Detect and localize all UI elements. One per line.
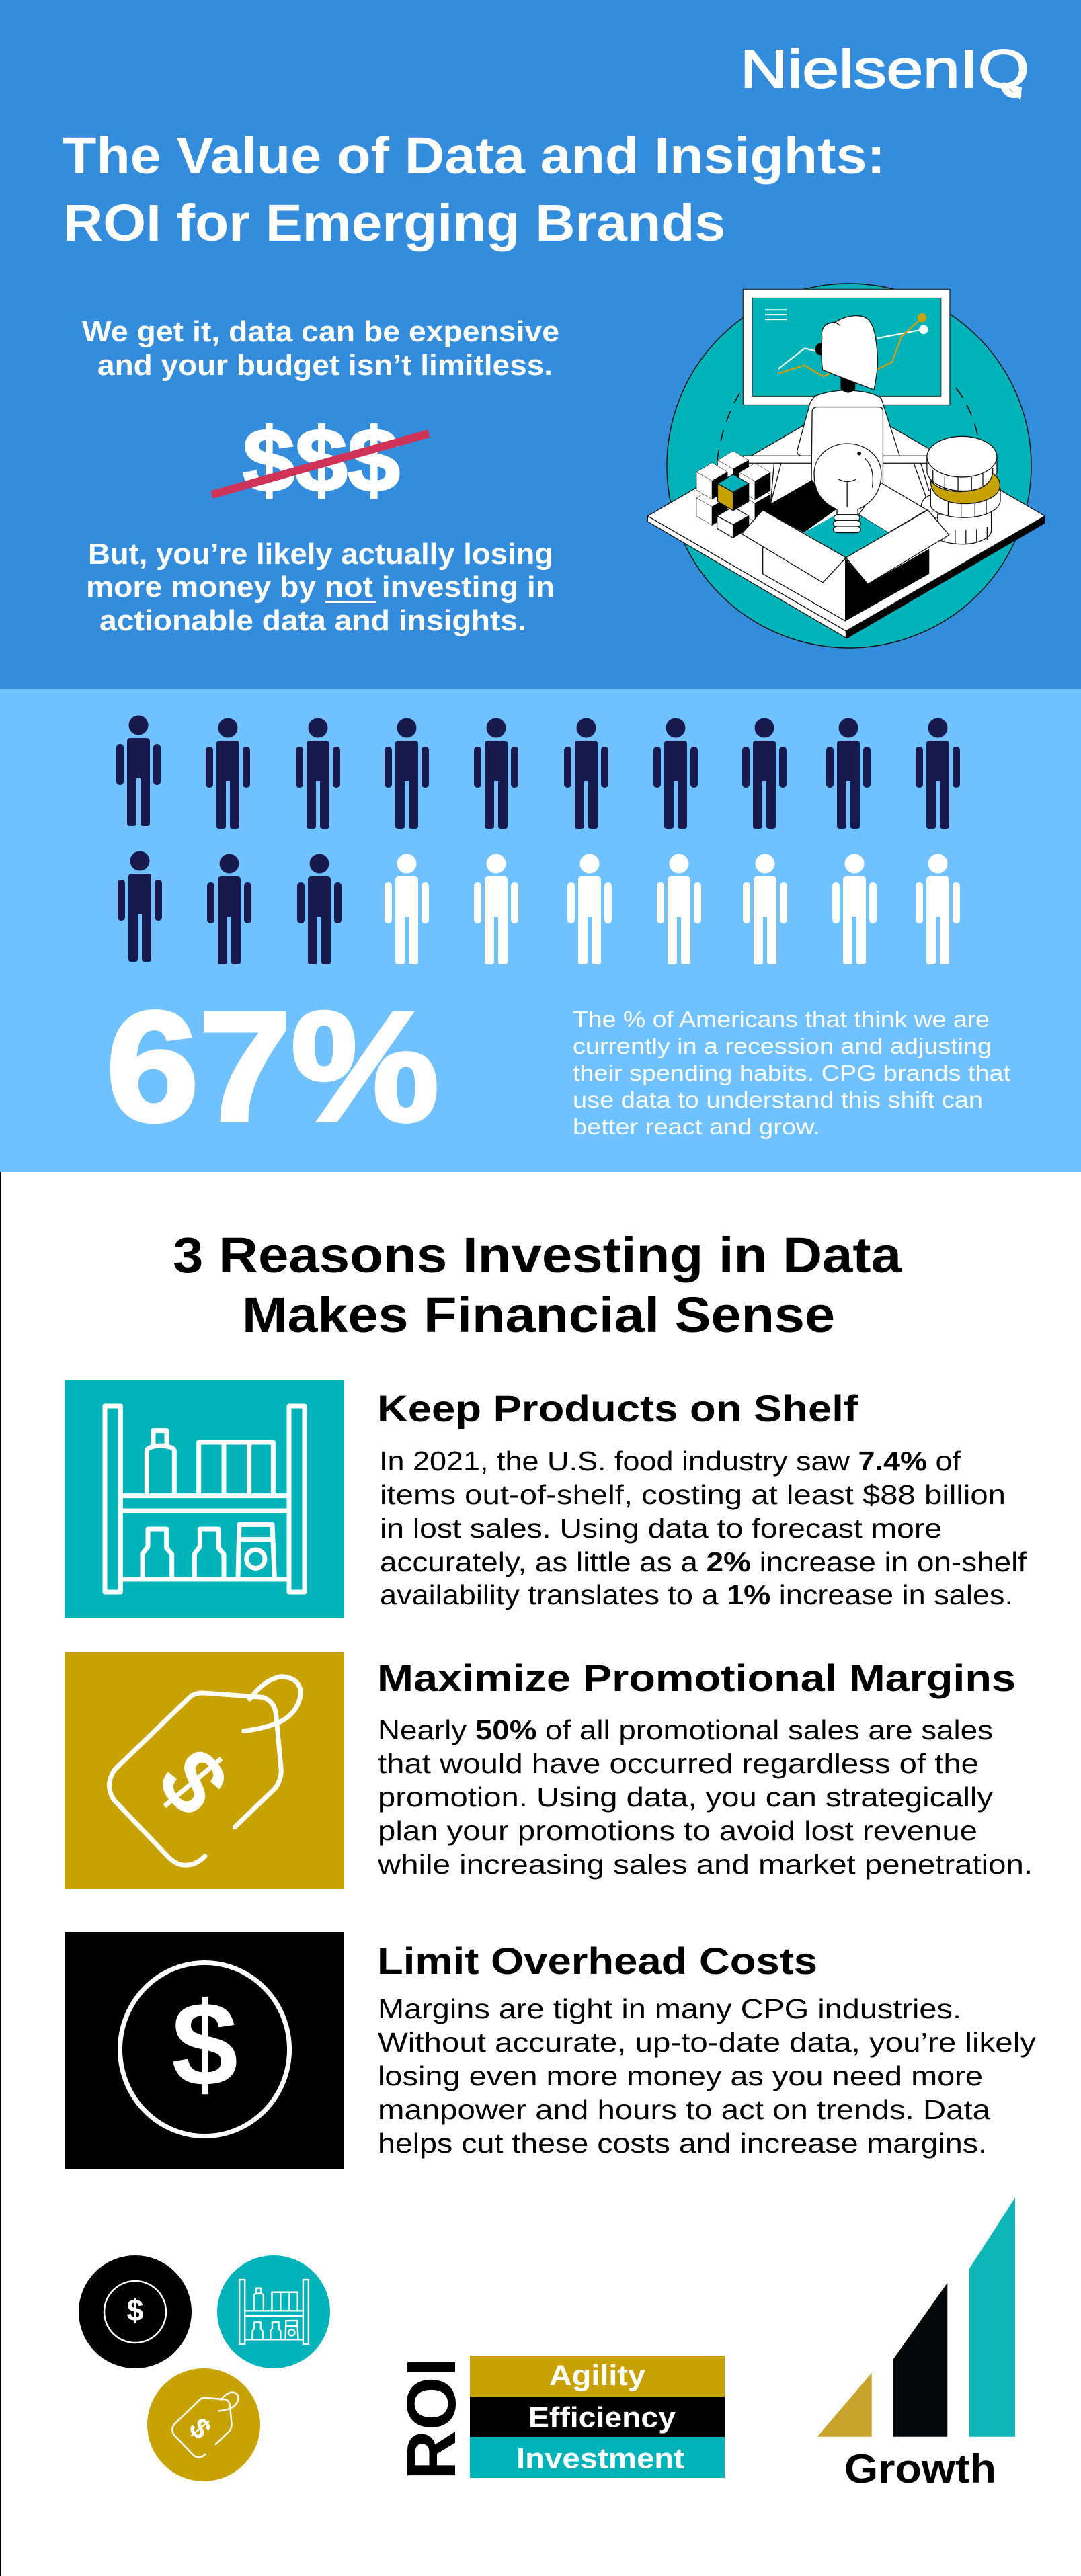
icon: struck-through dollar signs: $$$ (243, 411, 400, 511)
heading: 3 reasons: 3 Reasons Investing in Data (173, 1227, 902, 1283)
band: agility (470, 2356, 725, 2397)
panel: blue header (0, 0, 1081, 689)
icon: three round badges: $ (126, 2293, 144, 2327)
icon: black dollar coin tile: $ (171, 1977, 238, 2111)
band: investment: Investment (516, 2443, 684, 2475)
text block: overhead (378, 1993, 1037, 2159)
text block: overhead: Margins are tight in many CPG industries. (378, 1993, 961, 2024)
text block: promotional sales: while increasing sales and market penetration. (377, 1849, 1033, 1880)
title: The Value of Data and Insights: (63, 127, 885, 185)
icon: teal shelf tile (65, 1380, 344, 1618)
panel: maximize promotional margins (65, 1652, 1033, 1889)
text block: overhead: helps cut these costs and increase margins. (378, 2128, 987, 2159)
icon: three round badges (79, 2255, 330, 2481)
panel: light blue statistic (0, 689, 1081, 1172)
chart: ROI stacked labels: ROI (393, 2358, 470, 2480)
desk (647, 401, 1045, 639)
band: efficiency: Efficiency (528, 2402, 676, 2434)
text block: recession statistic (573, 1007, 1010, 1139)
heading: 3 reasons (173, 1227, 902, 1343)
text block: promotional sales: plan your promotions to avoid lost revenue (378, 1815, 977, 1846)
text block: recession statistic: better react and grow. (573, 1114, 820, 1139)
big number: 67%: 67% (106, 980, 439, 1154)
text block: out-of-shelf: items out-of-shelf, costing at least $88 billion (380, 1479, 1006, 1510)
text block: overhead: Without accurate, up-to-date data, you’re likely (378, 2027, 1037, 2058)
heading: maximize promotional margins: Maximize Promotional Margins (377, 1657, 1016, 1699)
text block: promotional sales: promotion. Using data, you can strategically (378, 1782, 994, 1813)
cubes (696, 451, 770, 538)
monitor (743, 289, 950, 405)
text block: data can be expensive: and your budget isn’t limitless. (97, 349, 553, 382)
logo: NielsenIQ: NielsenIQ (740, 39, 1029, 99)
heading: 3 reasons: Makes Financial Sense (242, 1287, 835, 1343)
text block: promotional sales (377, 1714, 1033, 1880)
text block: out-of-shelf (379, 1446, 1027, 1610)
illustration: person at desk with monitor, box, lightbulb, cubes and coins (647, 284, 1045, 648)
band: agility: Agility (549, 2360, 645, 2392)
icon: gold price tag tile: $ (138, 1730, 249, 1833)
text block: out-of-shelf: In 2021, the U.S. food industry saw 7.4% of (379, 1446, 961, 1477)
text block: out-of-shelf: accurately, as little as a 2% increase in on-shelf (380, 1546, 1027, 1577)
text block: recession statistic: their spending habits. CPG brands that (573, 1061, 1010, 1085)
icon: black dollar coin tile (65, 1932, 344, 2169)
icon: struck-through dollar signs (212, 411, 429, 511)
person (797, 316, 899, 491)
lightbulb (814, 444, 881, 533)
open box (742, 480, 949, 584)
panel: limit overhead costs (65, 1932, 1037, 2169)
text block: recession statistic: currently in a recession and adjusting (573, 1034, 992, 1058)
text block: data can be expensive (82, 315, 559, 382)
text block: out-of-shelf: availability translates to a 1% increase in sales. (380, 1579, 1013, 1610)
heading: keep products on shelf: Keep Products on Shelf (377, 1387, 858, 1429)
text block: overhead: losing even more money as you need more (378, 2061, 983, 2091)
chart: growth bars: Growth (844, 2446, 996, 2491)
text block: losing more money: actionable data and insights. (99, 604, 526, 637)
box sides (763, 548, 929, 621)
text block: out-of-shelf: in lost sales. Using data to forecast more (380, 1513, 942, 1544)
icon: gold price tag tile (65, 1652, 344, 1889)
text block: promotional sales: that would have occurred regardless of the (378, 1748, 979, 1779)
panel: keep products on shelf (65, 1380, 1027, 1618)
text block: losing more money: But, you’re likely actually losing (88, 538, 553, 571)
title (63, 127, 885, 252)
band: investment (470, 2437, 725, 2478)
coins (922, 436, 1000, 544)
text block: overhead: manpower and hours to act on trends. Data (378, 2094, 990, 2125)
heading: limit overhead costs: Limit Overhead Costs (377, 1940, 817, 1982)
pictogram: row two of people (118, 851, 960, 964)
chart: growth bars (817, 2198, 1015, 2491)
text block: recession statistic: use data to understand this shift can (573, 1087, 983, 1112)
text block: losing more money: more money by not investing in (86, 571, 555, 604)
text block: promotional sales: Nearly 50% of all promotional sales are sales (378, 1714, 993, 1745)
band: efficiency (470, 2397, 725, 2437)
text block: losing more money (86, 538, 555, 637)
chart: ROI stacked labels (393, 2356, 725, 2480)
text block: data can be expensive: We get it, data can be expensive (82, 315, 559, 348)
text block: recession statistic: The % of Americans that think we are (573, 1007, 990, 1032)
pictogram: row one of people (116, 715, 960, 829)
icon: three round badges: $ (182, 2412, 217, 2445)
title: ROI for Emerging Brands (63, 194, 725, 252)
